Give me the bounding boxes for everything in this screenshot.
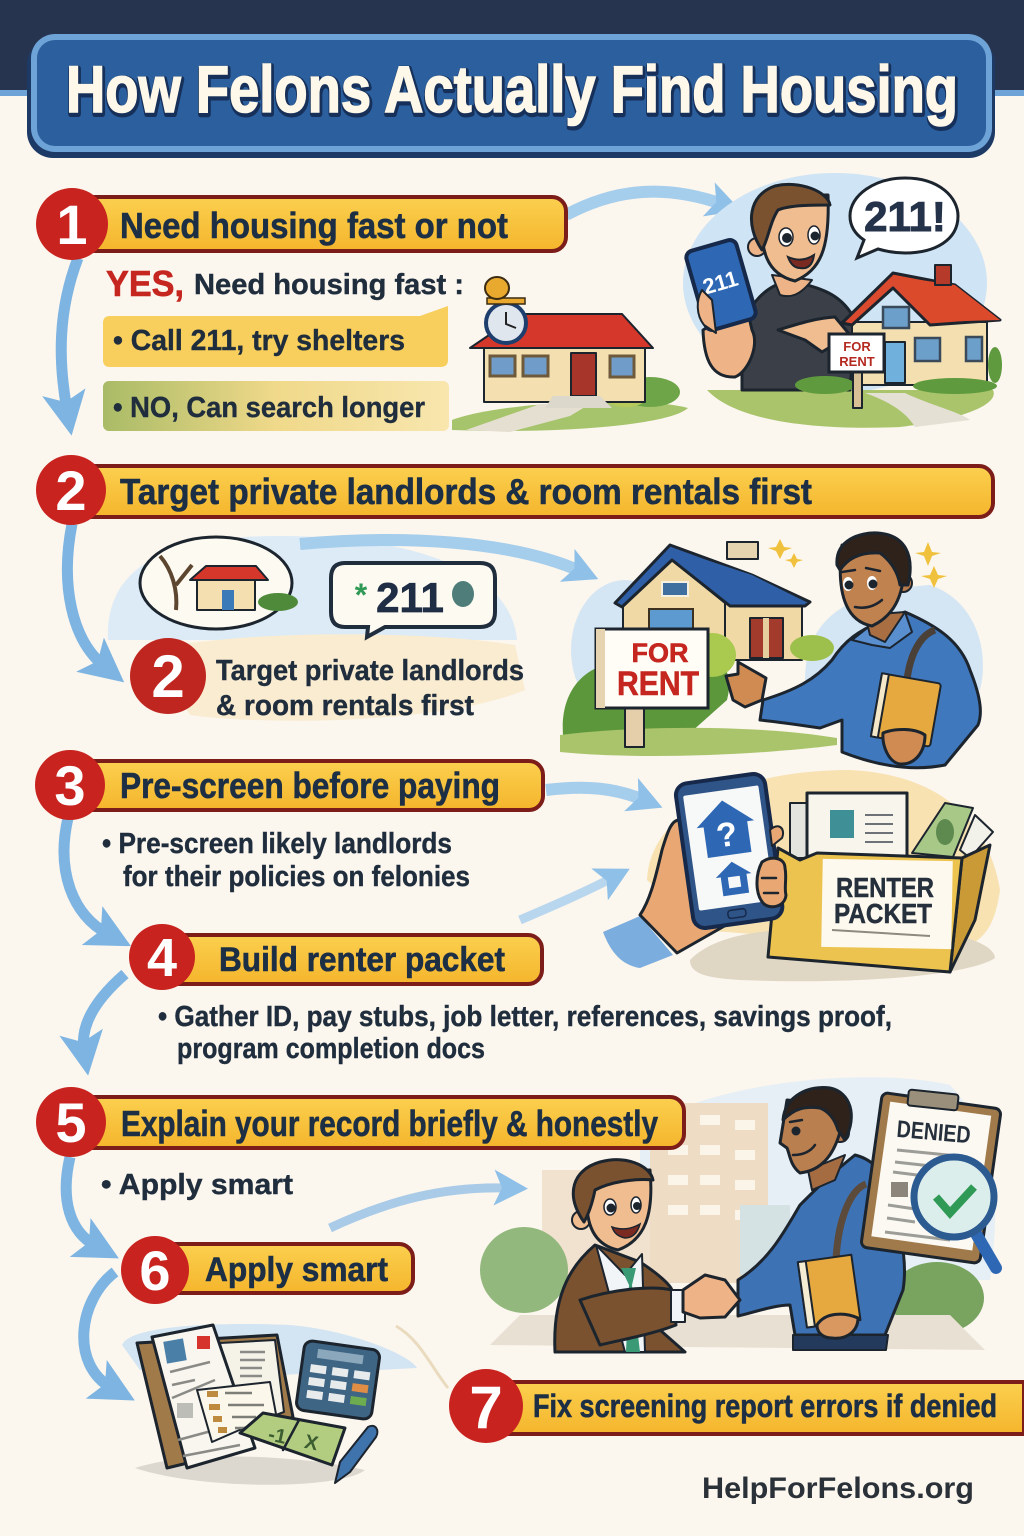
chimney <box>727 542 758 559</box>
step 6 header: 6 <box>139 1239 171 1302</box>
bushes <box>795 376 855 394</box>
page lines <box>170 1352 265 1456</box>
callout: search longer: • NO, Can search longer <box>113 392 425 424</box>
top navy band <box>0 0 1024 90</box>
neck <box>772 275 812 296</box>
eyes <box>779 228 793 246</box>
illustration: for rent house and man: RENT <box>617 665 699 703</box>
red tab <box>197 1336 210 1349</box>
neck <box>808 1155 845 1190</box>
walkway <box>865 393 970 427</box>
illustration: man with phone and house: RENT <box>839 354 875 369</box>
callout: search longer <box>103 381 449 431</box>
neck <box>865 612 905 642</box>
cuff <box>671 1290 685 1322</box>
connector curve to step 7 <box>396 1326 448 1388</box>
illustration: denied clipboard with magnifier <box>861 1089 1001 1268</box>
strap <box>836 1184 866 1260</box>
roof window <box>662 582 688 596</box>
phone <box>674 772 784 930</box>
arrow: step 2 down <box>67 524 104 666</box>
ground stain <box>690 928 995 981</box>
house wing <box>725 603 802 660</box>
side block <box>740 1205 790 1275</box>
wide window <box>649 609 693 629</box>
step 6 header <box>121 1236 413 1304</box>
lawn <box>560 728 837 756</box>
fingers on phone <box>698 290 716 333</box>
student face <box>780 1100 845 1173</box>
arrow: step 5 down <box>66 1157 96 1246</box>
lawn <box>707 390 994 428</box>
small sheet <box>197 1382 276 1442</box>
bushes <box>563 647 729 735</box>
ear <box>894 574 912 592</box>
house roof <box>842 273 1000 325</box>
step 6 header: Apply smart <box>205 1251 388 1289</box>
book <box>871 673 941 747</box>
step 3 text <box>102 828 470 893</box>
face <box>762 195 828 281</box>
photo <box>830 810 854 838</box>
arrow: step 4 to illustration <box>520 878 612 920</box>
sheet <box>871 1102 991 1250</box>
doc lines <box>865 815 893 842</box>
agent jacket <box>555 1245 685 1352</box>
phone: ? <box>714 815 740 855</box>
illustration: for rent house and man: FOR <box>632 638 688 668</box>
arrow: step 3 down <box>64 818 108 934</box>
windows <box>883 307 909 328</box>
ground <box>490 1315 985 1350</box>
step 4 header <box>129 924 542 990</box>
money: X <box>302 1431 321 1455</box>
thought oval with house <box>140 537 298 629</box>
speech bubble: 211!: 211! <box>864 193 946 240</box>
step 2 sub item: 2 <box>151 643 185 710</box>
step 2 header <box>36 455 993 525</box>
step 2 sub item: & room rentals first <box>216 690 474 722</box>
agent eyes <box>604 1199 616 1215</box>
agent arm <box>580 1288 676 1345</box>
arrow: step 6 down <box>84 1272 115 1388</box>
speech bubble: 211 <box>331 563 495 637</box>
illustration: documents, calculator and money <box>122 1324 417 1485</box>
renter packet label: PACKET <box>834 898 932 929</box>
sparkles <box>768 539 947 588</box>
step 4 text: program completion docs <box>177 1033 485 1065</box>
step 1 header <box>36 188 566 260</box>
fingers <box>757 858 786 907</box>
ear <box>572 1211 590 1229</box>
arrow: step 1 to illustration <box>566 192 722 215</box>
illustration: phone and renter packet <box>603 770 1000 981</box>
speech bubble: 211: 211 <box>376 574 444 621</box>
callout: call 211 <box>103 306 448 367</box>
money <box>240 1413 345 1465</box>
band edge stripe <box>0 90 1024 96</box>
step 4 text <box>158 1001 892 1065</box>
step 1 header: Need housing fast or not <box>120 205 508 246</box>
palm <box>640 820 735 953</box>
right page <box>220 1340 284 1430</box>
folder front <box>768 848 962 972</box>
folder side <box>950 845 990 972</box>
student eye and smile <box>792 1126 800 1136</box>
sign post <box>625 708 644 747</box>
illustration: man with phone and house: FOR <box>843 339 871 354</box>
step 4 header: Build renter packet <box>219 941 505 979</box>
shirt and tie <box>596 1245 645 1352</box>
blue wash <box>122 1324 417 1375</box>
sleeve <box>603 916 673 968</box>
step 3 header: Pre-screen before paying <box>120 765 500 806</box>
step 4 header: 4 <box>147 928 177 988</box>
phone: 211 <box>700 266 741 300</box>
building windows <box>668 1120 755 1215</box>
speech bubble: 211! <box>850 178 958 258</box>
blue badge <box>163 1338 187 1364</box>
need housing text: Need housing fast : <box>194 269 464 301</box>
for rent sign <box>829 334 884 372</box>
sign post <box>853 372 862 408</box>
background wash: step 2 text <box>150 634 525 721</box>
step 2 sub item: Target private landlords <box>216 655 524 687</box>
phone arm <box>703 300 755 377</box>
door <box>885 342 905 383</box>
top finger <box>770 826 783 846</box>
step 3 header: 3 <box>54 754 86 817</box>
face <box>840 545 905 626</box>
right tree <box>890 1262 984 1334</box>
man body <box>760 612 980 768</box>
illustration: handshake scene <box>480 1077 995 1352</box>
agent hair <box>573 1160 653 1222</box>
step 7 header <box>449 1369 1024 1443</box>
sky wash <box>683 173 987 393</box>
book <box>798 1255 860 1328</box>
background wash: step 2 <box>108 536 517 640</box>
back doc <box>790 803 810 858</box>
arrow: step 2 to illustration <box>300 540 580 571</box>
denied text: DENIED <box>896 1116 972 1149</box>
hair <box>751 184 830 250</box>
agent face <box>587 1170 651 1250</box>
mouth <box>788 255 814 268</box>
pointing hand <box>778 317 850 352</box>
sky wash right <box>805 585 983 690</box>
chimney <box>935 265 951 285</box>
collar <box>852 612 912 648</box>
tall building <box>650 1103 768 1283</box>
step 4 text: • Gather ID, pay stubs, job letter, references, savings proof, <box>158 1001 892 1033</box>
handshake <box>683 1275 740 1318</box>
title banner <box>27 34 995 158</box>
step 5 text: • Apply smart <box>101 1169 293 1201</box>
yes label: YES, <box>106 263 184 304</box>
red doors <box>750 618 783 658</box>
sheet lines <box>885 1150 968 1240</box>
callout: call 211: • Call 211, try shelters <box>113 325 405 357</box>
sign <box>596 629 708 708</box>
orange wash <box>647 770 1000 950</box>
holding hand <box>817 1314 858 1338</box>
roof <box>615 545 810 607</box>
illustration: small house with clock <box>452 277 688 432</box>
main doc <box>807 793 907 858</box>
illustration: for rent house and man <box>560 533 983 768</box>
student hair <box>783 1087 851 1140</box>
house walls <box>852 322 987 385</box>
agent mouth <box>612 1224 640 1238</box>
phone <box>685 238 757 332</box>
sky wash <box>640 1077 995 1280</box>
handle <box>975 1232 996 1268</box>
arrow: step 6 to illustration <box>330 1188 508 1228</box>
arrow: step 3 to illustration <box>546 788 644 800</box>
magnifier <box>914 1157 994 1237</box>
step 3 header <box>35 750 543 820</box>
pointing hand <box>726 662 766 707</box>
step 3 text: for their policies on felonies <box>123 861 470 893</box>
step 3 text: • Pre-screen likely landlords <box>102 828 452 860</box>
step 5 header <box>36 1087 684 1157</box>
left page <box>152 1325 255 1468</box>
calculator <box>295 1340 381 1420</box>
money <box>912 803 973 857</box>
step 1 header: 1 <box>56 193 88 256</box>
step 5 header: Explain your record briefly & honestly <box>121 1103 658 1144</box>
low building <box>542 1170 652 1280</box>
step 5 header: 5 <box>55 1091 87 1154</box>
house front <box>623 560 725 660</box>
strap <box>907 630 935 680</box>
step 2 header: Target private landlords & room rentals first <box>120 471 812 512</box>
grey photo <box>177 1403 193 1418</box>
money: -1 <box>266 1424 288 1449</box>
ear <box>831 1124 849 1142</box>
binder <box>137 1335 293 1468</box>
renter packet label <box>821 859 953 949</box>
hair <box>837 533 910 585</box>
bullets <box>207 1394 227 1430</box>
footer url: HelpForFelons.org <box>702 1472 974 1505</box>
step 2 sub item <box>130 638 524 722</box>
student pants <box>793 1335 888 1350</box>
renter packet label: RENTER <box>836 872 934 903</box>
clip <box>907 1089 959 1111</box>
holding hand <box>883 729 925 764</box>
pen <box>335 1426 377 1483</box>
board <box>861 1092 1001 1264</box>
sky wash left <box>571 580 679 720</box>
step 7 header: 7 <box>469 1374 503 1441</box>
eyes and smile <box>843 577 853 591</box>
student hoodie <box>738 1155 904 1335</box>
arrow: step 4 down <box>83 974 125 1050</box>
ear <box>748 238 766 256</box>
paper behind money <box>960 815 993 858</box>
check mark <box>936 1187 974 1213</box>
shirt <box>742 280 855 390</box>
illustration: man with phone and house <box>683 173 1002 428</box>
arrow: step 1 down <box>61 258 78 410</box>
speech bubble: 211: * <box>355 577 368 613</box>
left tree <box>480 1227 568 1313</box>
step 2 header: 2 <box>55 459 87 522</box>
ground stain <box>135 1456 365 1485</box>
